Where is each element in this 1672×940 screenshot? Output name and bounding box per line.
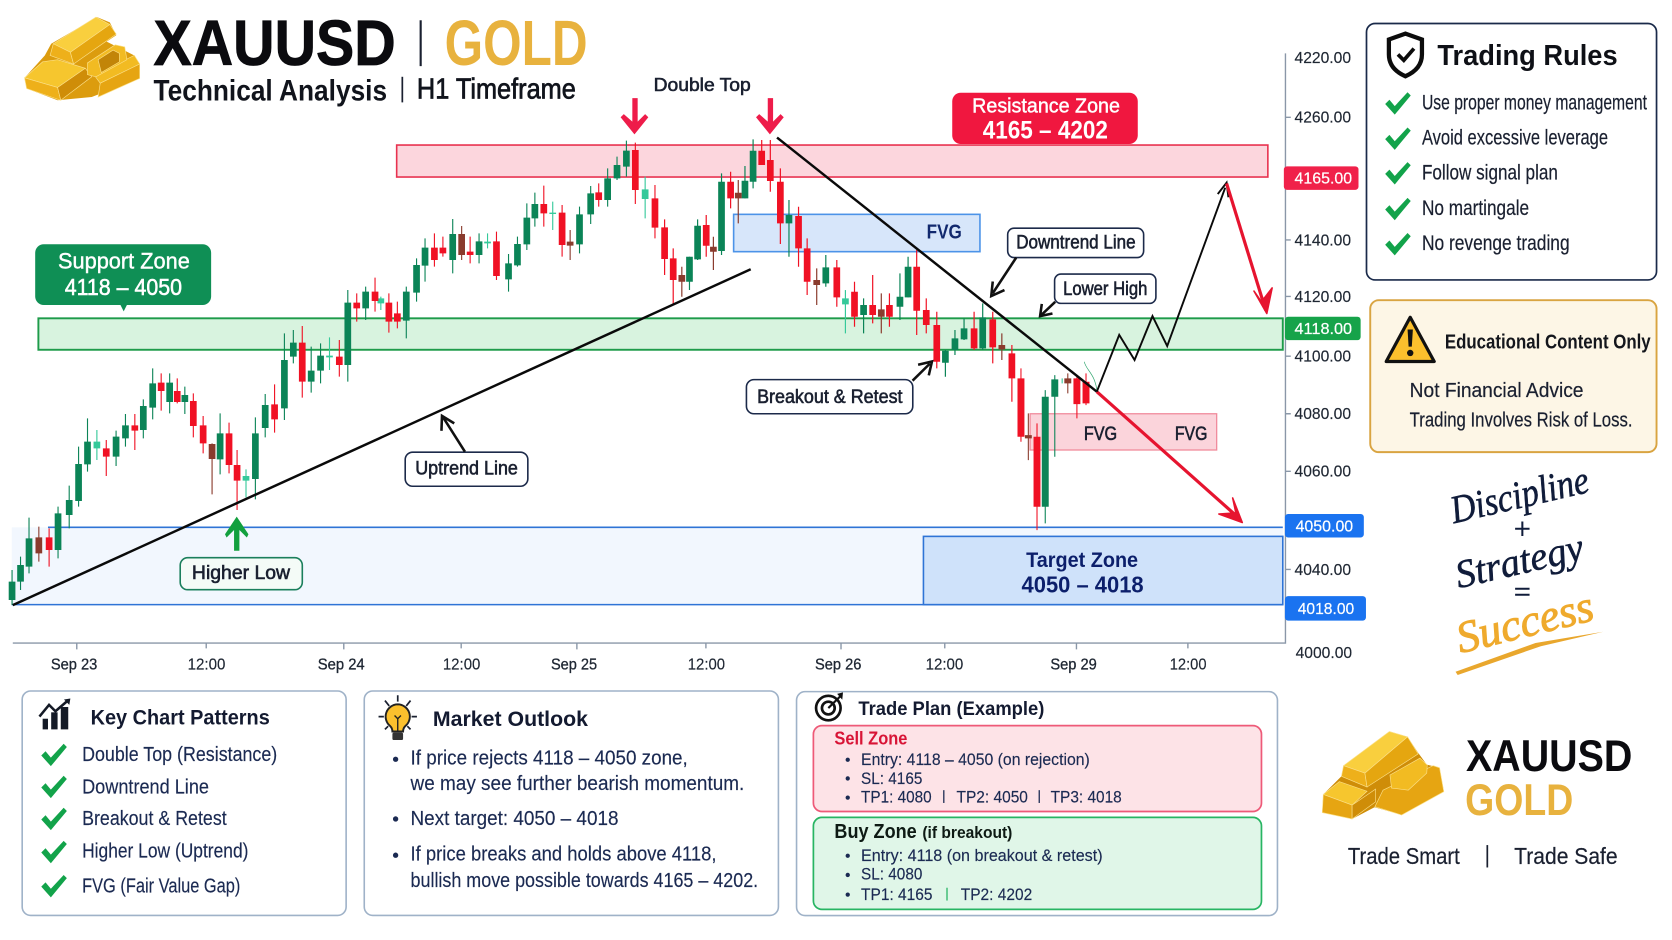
sub-panel: buy zone: TP1: 4165	[861, 885, 933, 904]
callout: breakout and retest: Breakout & Retest	[757, 387, 903, 408]
callout: target zone: Target Zone	[1026, 548, 1138, 572]
icon: shield	[1389, 34, 1422, 76]
title: XAUUSD GOLD: GOLD	[445, 7, 588, 79]
time axis labels: 12:00	[688, 656, 725, 673]
callout: resistance zone: Resistance Zone	[972, 96, 1120, 118]
footer logo: XAUUSD GOLD: GOLD	[1465, 775, 1573, 825]
zone: resistance band	[397, 145, 1268, 177]
time axis labels: Sep 26	[815, 656, 861, 673]
zone: blue fair value gap	[734, 214, 980, 252]
rule 2: Avoid excessive leverage	[1422, 127, 1608, 150]
callout: higher low	[180, 558, 302, 590]
rule 2	[1385, 127, 1608, 150]
price badge 4165: 4165.00	[1295, 170, 1352, 187]
arrow: higher low	[225, 517, 248, 551]
slogan: discipline plus strategy equals success: Strategy	[1451, 525, 1588, 597]
line: uptrend	[13, 269, 751, 605]
callout: resistance zone	[952, 93, 1138, 144]
icon: chart	[39, 698, 70, 729]
arrow: second top	[756, 98, 784, 134]
title: XAUUSD GOLD	[154, 7, 588, 79]
outlook bullet 1: we may see further bearish momentum.	[410, 773, 744, 795]
price axis labels: 4140.00	[1295, 232, 1351, 249]
chart axes	[13, 53, 1291, 649]
callout: lower high	[1040, 274, 1156, 316]
heading: market outlook: Market Outlook	[433, 707, 588, 731]
label: fvg red left: FVG	[1084, 424, 1117, 445]
icon: gold bars footer	[1322, 732, 1444, 819]
slogan: discipline plus strategy equals success: Success	[1451, 581, 1598, 663]
callout: target zone: 4050 – 4018	[1022, 571, 1144, 597]
outlook bullet 2: Next target: 4050 – 4018	[411, 808, 618, 830]
sub-panel: buy zone: TP2: 4202	[961, 885, 1032, 904]
price axis labels	[1295, 50, 1352, 662]
footer logo: XAUUSD GOLD	[1465, 731, 1632, 825]
rule 5	[1385, 232, 1570, 255]
price axis labels: 4080.00	[1295, 406, 1351, 423]
sub-panel: sell zone: TP1: 4080	[861, 788, 932, 807]
time axis labels	[51, 656, 1207, 673]
arrow: first top	[621, 98, 648, 134]
callout: support zone: Support Zone	[58, 248, 190, 273]
price badge 4018	[1285, 596, 1366, 621]
callout: higher low: Higher Low	[192, 563, 290, 584]
callout: resistance zone: 4165 – 4202	[983, 117, 1108, 144]
outlook bullet 3: bullish move possible towards 4165 – 4202.	[411, 870, 758, 892]
price axis labels: 4060.00	[1295, 464, 1351, 481]
price badge 4165	[1284, 166, 1358, 190]
zone: target box	[923, 536, 1283, 605]
callout: uptrend line	[405, 416, 528, 486]
arrow: projected bearish path	[1097, 392, 1242, 523]
callout: breakout and retest	[746, 362, 932, 414]
sub-panel: buy zone: Buy Zone	[834, 821, 917, 843]
pattern: downtrend line	[41, 776, 209, 798]
sub-panel: sell zone: Entry: 4118 – 4050 (on rejection)	[861, 750, 1090, 769]
slogan: discipline plus strategy equals success: +	[1512, 513, 1532, 546]
rule 3	[1385, 162, 1558, 185]
sub-panel: buy zone: SL: 4080	[861, 865, 922, 884]
sub-panel: sell zone	[813, 726, 1261, 811]
label: fvg red right: FVG	[1175, 424, 1207, 445]
subtitle: technical analysis and timeframe	[154, 74, 576, 107]
label: fvg blue: FVG	[927, 221, 962, 243]
tagline: trade smart trade safe	[1348, 843, 1618, 869]
pattern: breakout and retest: Breakout & Retest	[82, 808, 227, 830]
price axis labels: 4000.00	[1296, 645, 1352, 662]
pattern: higher low: Higher Low (Uptrend)	[82, 840, 248, 862]
rule 5: No revenge trading	[1422, 232, 1570, 255]
outlook bullet 3	[393, 844, 758, 892]
disclaimer text	[1410, 380, 1633, 432]
callout: support zone	[35, 244, 211, 311]
sub-panel: buy zone	[813, 817, 1261, 909]
icon: gold bars header	[25, 17, 140, 100]
callout: support zone: 4118 – 4050	[65, 274, 182, 300]
outlook bullet 1: If price rejects 4118 – 4050 zone,	[411, 748, 688, 770]
callout: downtrend line	[991, 228, 1144, 296]
footer logo: XAUUSD GOLD: XAUUSD	[1466, 731, 1632, 781]
icon: warning triangle	[1386, 317, 1434, 362]
outlook bullet 1	[393, 748, 744, 795]
price badge 4118	[1285, 317, 1361, 340]
price axis labels: 4100.00	[1295, 349, 1351, 366]
outlook bullet 3: If price breaks and holds above 4118,	[411, 844, 717, 866]
price badge 4018: 4018.00	[1298, 601, 1354, 618]
time axis labels: Sep 23	[51, 656, 97, 673]
time axis labels: Sep 24	[318, 656, 365, 673]
time axis labels: 12:00	[188, 656, 226, 673]
time axis labels: 12:00	[926, 656, 963, 673]
price axis labels: 4260.00	[1295, 110, 1351, 127]
candles: right section	[1021, 362, 1097, 530]
zone: support band	[38, 318, 1283, 350]
sub-panel: buy zone: (if breakout)	[922, 823, 1012, 842]
rule 4: No martingale	[1422, 197, 1529, 220]
time axis labels: 12:00	[1170, 656, 1207, 673]
label: double top: Double Top	[654, 75, 751, 95]
pattern: downtrend line: Downtrend Line	[82, 776, 209, 798]
sub-panel: sell zone: SL: 4165	[861, 769, 922, 788]
candles: left section	[12, 141, 655, 605]
heading: trading rules: Trading Rules	[1437, 40, 1618, 72]
zone: red fair value gap	[1030, 414, 1217, 450]
pattern: higher low	[41, 840, 248, 863]
subtitle: technical analysis and timeframe: Technical Analysis	[154, 74, 387, 107]
rule 3: Follow signal plan	[1422, 162, 1558, 185]
price axis labels: 4040.00	[1295, 562, 1351, 579]
rule 4	[1385, 197, 1529, 220]
callout: lower high: Lower High	[1063, 279, 1147, 300]
callout: target zone	[1022, 548, 1144, 597]
panel: trading rules	[1366, 23, 1657, 280]
pattern: breakout and retest	[41, 808, 227, 830]
slogan: discipline plus strategy equals success: Discipline	[1445, 458, 1593, 532]
time axis labels: Sep 29	[1050, 656, 1097, 673]
price axis labels: 4220.00	[1295, 50, 1351, 67]
subtitle: technical analysis and timeframe: H1 Timeframe	[417, 74, 576, 106]
price badge 4118: 4118.00	[1295, 321, 1352, 338]
pattern: fair value gap: FVG (Fair Value Gap)	[82, 876, 240, 898]
price badge 4050	[1285, 514, 1364, 537]
sub-panel: sell zone: TP3: 4018	[1051, 788, 1122, 807]
sub-panel: buy zone: Entry: 4118 (on breakout & retest)	[861, 846, 1103, 865]
title: XAUUSD GOLD: XAUUSD	[154, 7, 396, 79]
icon: light bulb	[379, 695, 417, 740]
icon: target	[816, 693, 842, 720]
price badge 4050: 4050.00	[1296, 519, 1353, 536]
panel: trade plan	[797, 692, 1277, 916]
panel: educational disclaimer	[1370, 300, 1657, 452]
pattern: fair value gap	[41, 875, 240, 898]
candlesticks	[12, 139, 1097, 605]
panel: market outlook	[364, 691, 778, 915]
sub-panel: sell zone: Sell Zone	[834, 728, 907, 748]
callout: downtrend line: Downtrend Line	[1016, 232, 1136, 253]
arrow: red projection from resistance	[1227, 183, 1272, 314]
line: downtrend	[777, 138, 1097, 392]
zone: wide target band	[12, 527, 1283, 605]
sub-panel: sell zone: TP2: 4050	[956, 788, 1028, 807]
disclaimer text: Not Financial Advice	[1410, 380, 1583, 402]
time axis labels: Sep 25	[551, 656, 597, 673]
candles: middle section	[665, 139, 1012, 402]
disclaimer text: Trading Involves Risk of Loss.	[1410, 410, 1633, 432]
heading: key chart patterns: Key Chart Patterns	[91, 707, 270, 730]
pattern: double top: Double Top (Resistance)	[82, 744, 277, 766]
time axis labels: 12:00	[443, 656, 480, 673]
tagline: trade smart trade safe: Trade Safe	[1514, 843, 1618, 869]
slogan: discipline plus strategy equals success: =	[1512, 575, 1532, 608]
panel: key chart patterns	[22, 691, 346, 915]
heading: trade plan: Trade Plan (Example)	[858, 698, 1044, 720]
slogan: discipline plus strategy equals success	[1445, 458, 1603, 675]
price axis labels: 4120.00	[1295, 289, 1351, 306]
callout: uptrend line: Uptrend Line	[415, 458, 518, 479]
arrow: projected bullish zigzag	[1097, 183, 1228, 392]
tagline: trade smart trade safe: Trade Smart	[1348, 843, 1460, 869]
